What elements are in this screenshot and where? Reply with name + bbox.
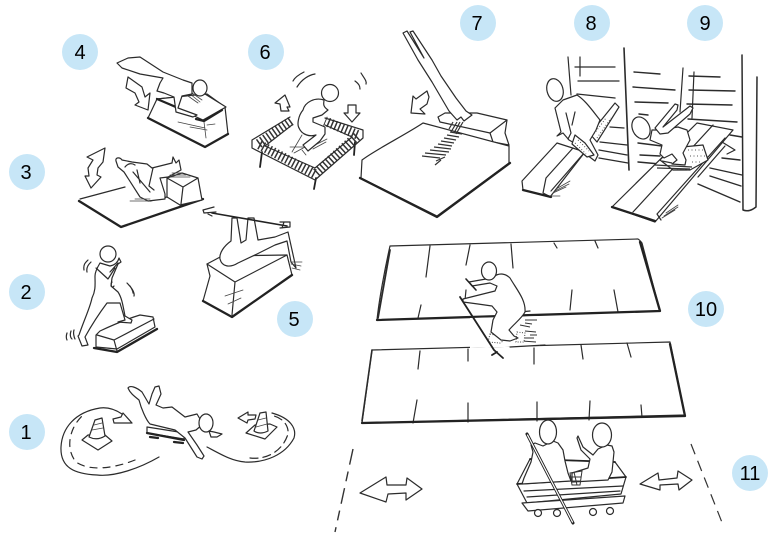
incline board [522,143,585,197]
curved up-down arrow [85,148,105,188]
head rear [592,423,612,447]
badge 4 [62,34,98,70]
station 10: paddling across gap between mats [362,239,685,423]
scooter board [147,427,185,443]
arms and motion lines [66,260,134,340]
station 8: wall bars with incline board [522,48,629,197]
arm detail [566,112,575,139]
head [199,414,213,432]
motion hatch [290,134,327,155]
sitting figure [116,157,181,201]
hatch shadow on mat [422,122,463,165]
lower mat [362,342,685,423]
head front [540,420,556,444]
curved arrow [126,77,150,110]
badge 11 [732,455,768,491]
station 1: crawl on scooter around cones [61,386,295,475]
rear rider [572,436,614,482]
hatch under feet [655,161,692,169]
cart [517,459,626,516]
head [544,77,566,103]
left cone [82,418,112,450]
pole [527,434,573,523]
head [628,114,654,142]
box [167,173,202,205]
station 5: bench press on box [203,207,302,317]
lying figure [220,218,296,268]
figure-eight path [61,408,295,475]
head [482,262,496,280]
stepping figure [78,258,132,346]
arrows on path [113,412,256,423]
badge 10 [688,291,724,327]
badge 3: 3 [20,162,32,184]
badge 7: 7 [471,13,483,35]
right cone [246,412,277,439]
landing mat [360,123,510,217]
support block [590,103,619,142]
trampoline frame [252,117,363,180]
arms reaching up [655,104,693,134]
badge 2: 2 [20,282,32,304]
motion lines [293,72,366,89]
foot hatch [291,262,302,270]
station 7: handstand onto mat [360,31,510,217]
rotation arrow [411,91,429,114]
badge 6 [248,34,284,70]
mat [79,187,203,227]
double incline board [612,123,735,222]
speckled block [572,135,594,157]
badge 3 [9,154,45,190]
badge 8: 8 [585,13,597,35]
speckled block [660,145,708,170]
left double arrow [360,477,422,502]
box [203,255,292,317]
body detail lines [125,164,154,192]
down arrow [344,105,360,122]
gap hatching and speckle [470,311,545,348]
handstand figure [403,31,472,121]
paddle poles [460,279,503,358]
badge 1: 1 [20,422,32,444]
badge 8 [574,5,610,41]
jumping figure [298,99,328,151]
right double arrow [640,471,692,490]
speckle detail [575,118,611,154]
badge 6: 6 [259,42,271,64]
station 9: wall bars with double incline boards [612,55,757,222]
badge 10: 10 [695,299,717,321]
wall bars [568,48,629,170]
head [193,80,207,96]
badge 5 [277,301,313,337]
station 2: step-ups on low platform [66,246,157,352]
station 6: trampoline jumps [252,72,366,189]
badge 9: 9 [699,13,711,35]
badge 11: 11 [740,463,760,485]
crouching figure [650,127,690,165]
station 4: back extension on box [117,57,228,147]
up arrow [275,95,290,111]
lying figure [128,386,204,459]
badge 2 [9,274,45,310]
head [322,84,338,102]
prone figure [117,57,197,117]
step platform [94,315,157,352]
badge 9 [687,5,723,41]
barbell [203,207,290,228]
hatch under figure and on box [130,173,190,201]
small box [438,113,509,145]
dashed boundary lines [335,444,723,532]
hatched centre [570,471,582,485]
figure pushing board [555,95,600,161]
station 11: scooter cart with two riders [335,420,723,532]
badge 4: 4 [74,42,86,64]
box [148,93,228,147]
front rider [522,441,571,484]
trampoline legs [260,142,355,189]
hand [209,431,222,437]
badge 7 [460,5,496,41]
wall bars [633,55,757,211]
badge 1 [9,414,45,450]
head [100,246,116,262]
crouching figure with poles [463,274,525,341]
station 3: sit-ups on mat with box [79,148,203,227]
badge 5: 5 [288,309,300,331]
upper mat [377,239,660,320]
